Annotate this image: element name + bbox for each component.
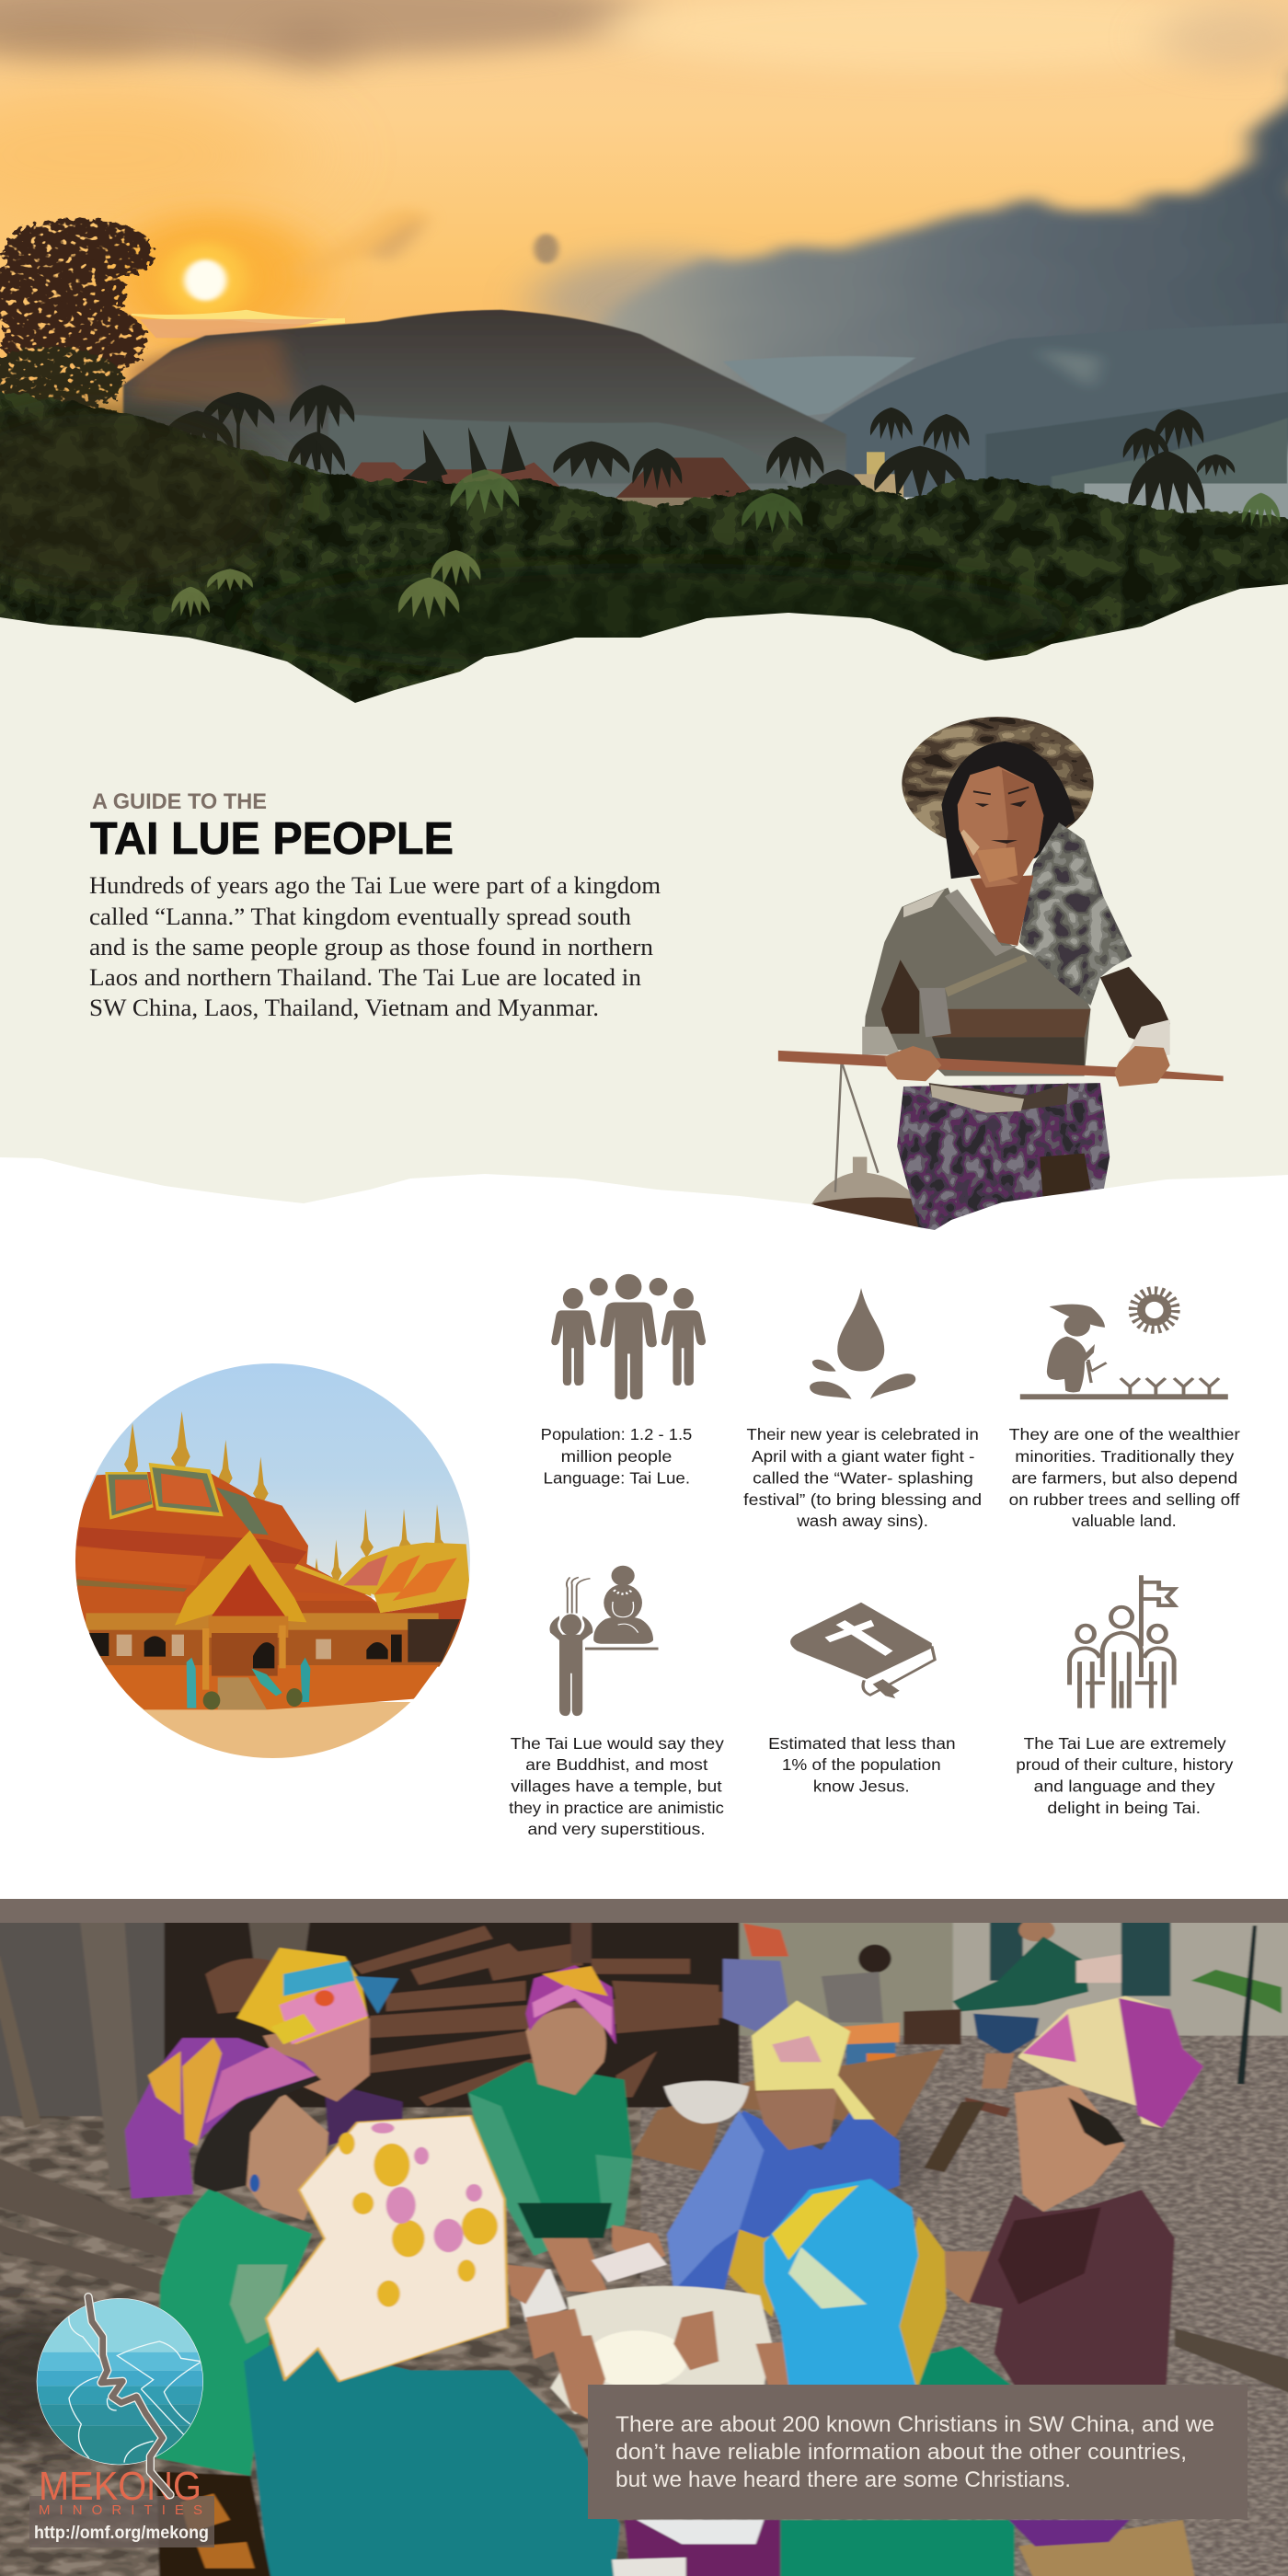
text: proud of being Tai: delight in being Tai.: [1047, 1799, 1201, 1817]
neck and face: [958, 766, 1043, 946]
woman in green with purple scarf: [468, 1965, 667, 2294]
sun: [165, 243, 247, 317]
rubber tree silhouettes: [161, 385, 1235, 522]
hands and arms: [507, 2265, 795, 2421]
text: wealthier minorities: on rubber trees and selling off: [1009, 1490, 1240, 1509]
logo subtitle: MINORITIES: [39, 2502, 202, 2518]
cooking pot with rice: [513, 2269, 772, 2414]
text: less than 1% know Jesus: 1% of the population: [782, 1755, 941, 1774]
woman in brown: [945, 1996, 1203, 2386]
intro paragraph: called “Lanna.” That kingdom eventually spread south: [89, 903, 631, 930]
intro paragraph: Hundreds of years ago the Tai Lue were part of a kingdom: [89, 871, 661, 899]
caption box: known Christians: [588, 2385, 1248, 2519]
website url: http://omf.org/mekong: [34, 2524, 209, 2543]
text: new year water festival: called the “Water- splashing: [753, 1468, 973, 1487]
forest canopy: [0, 389, 1288, 742]
scarf: [1019, 822, 1132, 1006]
logo globe with river: [30, 2297, 214, 2495]
storm clouds: [575, 61, 1288, 451]
text: population: Population: 1.2 - 1.5: [541, 1425, 693, 1443]
blouse: [862, 888, 1170, 1075]
text: wealthier minorities: are farmers, but also depend: [1012, 1468, 1237, 1487]
text: less than 1% know Jesus: [768, 1734, 956, 1796]
colonnade: [86, 1613, 463, 1667]
text: proud of being Tai: The Tai Lue are extremely: [1024, 1734, 1226, 1753]
guardian statues: [187, 1658, 310, 1709]
text: Buddhist and animistic: and very superstitious.: [528, 1820, 706, 1838]
heading: Tai Lue People: TAI LUE PEOPLE: [90, 814, 454, 864]
woman in purple headscarf, left: [125, 2038, 328, 2476]
icon: group of people: [551, 1274, 706, 1399]
heading: a guide to the: A GUIDE TO THE: [92, 789, 267, 814]
front woman with blue scarf: [707, 2179, 1015, 2576]
text: wealthier minorities: [1009, 1425, 1240, 1530]
temple sky: [71, 1359, 481, 1598]
right roofs: [338, 1543, 471, 1631]
skirt: [897, 1083, 1110, 1235]
text: wealthier minorities: valuable land.: [1072, 1512, 1177, 1530]
logo wordmark: MEKONG: [39, 2464, 201, 2509]
temple spires: [124, 1411, 447, 1585]
hero photo: sunset over mountains and forest: [0, 0, 1288, 742]
icon: Bible with cross: [790, 1603, 935, 1698]
icon: farmer planting under sun: [1020, 1291, 1228, 1399]
photo: women preparing rice together: [0, 1903, 1288, 2576]
sky: [0, 0, 1288, 422]
central gable: [175, 1530, 306, 1690]
circular photo: golden temple: [71, 1359, 481, 1769]
text: population: million people: [561, 1447, 672, 1466]
highlighted leaves: [171, 469, 1280, 620]
stool, box and skirts: [156, 2471, 1200, 2576]
icon: people with flag: [1070, 1575, 1175, 1708]
text: new year water festival: April with a giant water fight -: [752, 1447, 975, 1466]
mountains: [123, 310, 1288, 507]
main tiered roofs: [74, 1463, 408, 1628]
text: population: [541, 1425, 693, 1487]
text: new year water festival: wash away sins).: [796, 1512, 928, 1530]
caption box: known Christians: don’t have reliable information about the other countries,: [615, 2440, 1187, 2465]
text: Buddhist and animistic: villages have a temple, but: [511, 1777, 722, 1796]
temple ground: [134, 1702, 410, 1758]
front woman with floral scarf: [244, 2116, 620, 2576]
portrait: Tai Lue woman with hat and carrying pole: [778, 717, 1224, 1235]
ground and background: [0, 1903, 1288, 2576]
url backing: [29, 2496, 214, 2547]
cream intro panel with torn top edge: [0, 584, 1288, 1233]
logo: Mekong Minorities: [29, 2297, 214, 2547]
stacked logs: [205, 1903, 723, 2106]
left tall tree: [0, 218, 154, 413]
intro paragraph: [89, 871, 661, 1021]
pot and strings: [811, 1058, 923, 1231]
text: new year water festival: festival” (to bring blessing and: [743, 1490, 982, 1509]
intro paragraph: SW China, Laos, Thailand, Vietnam and Myanmar.: [89, 994, 599, 1021]
intro paragraph: Laos and northern Thailand. The Tai Lue are located in: [89, 963, 641, 991]
text: proud of being Tai: proud of their culture, history: [1016, 1755, 1234, 1774]
caption box: known Christians: There are about 200 known Christians in SW China, and we: [615, 2412, 1214, 2437]
white lower section with torn edge: [0, 1157, 1288, 2576]
intro paragraph: and is the same people group as those found in northern: [89, 933, 653, 960]
carrying pole: [778, 1051, 1224, 1081]
text: less than 1% know Jesus: know Jesus.: [813, 1777, 910, 1796]
text: Buddhist and animistic: The Tai Lue would say they: [511, 1734, 724, 1753]
icon: water drop and splash: [810, 1288, 915, 1399]
woman with blue shirt: [667, 2000, 900, 2317]
temple base: [101, 1665, 439, 1709]
text: proud of being Tai: and language and they: [1034, 1777, 1215, 1796]
hands: [884, 1046, 1170, 1087]
hair: [941, 742, 1075, 879]
text: less than 1% know Jesus: Estimated that less than: [768, 1734, 956, 1753]
text: Buddhist and animistic: [509, 1734, 724, 1838]
background man and children: [723, 1903, 1257, 2117]
text: wealthier minorities: minorities. Traditionally they: [1015, 1447, 1235, 1466]
text: new year water festival: [743, 1425, 982, 1530]
woman in yellow headscarf: [236, 1948, 403, 2145]
entrance and stairs: [212, 1633, 282, 1709]
icon: worshipper before Buddha statue: [549, 1566, 659, 1716]
text: Buddhist and animistic: they in practice are animistic: [509, 1799, 724, 1817]
text: population: Language: Tai Lue.: [543, 1468, 690, 1487]
text: Buddhist and animistic: are Buddhist, and most: [525, 1755, 707, 1774]
text: new year water festival: Their new year is celebrated in: [747, 1425, 979, 1443]
hat: [902, 717, 1094, 849]
divider band: [0, 1899, 1288, 1923]
table and bowl: [633, 2049, 985, 2172]
text: proud of being Tai: [1016, 1734, 1234, 1817]
rooftops: [349, 452, 1288, 531]
caption box: known Christians: but we have heard there are some Christians.: [615, 2467, 1071, 2492]
text: wealthier minorities: They are one of the wealthier: [1009, 1425, 1240, 1443]
